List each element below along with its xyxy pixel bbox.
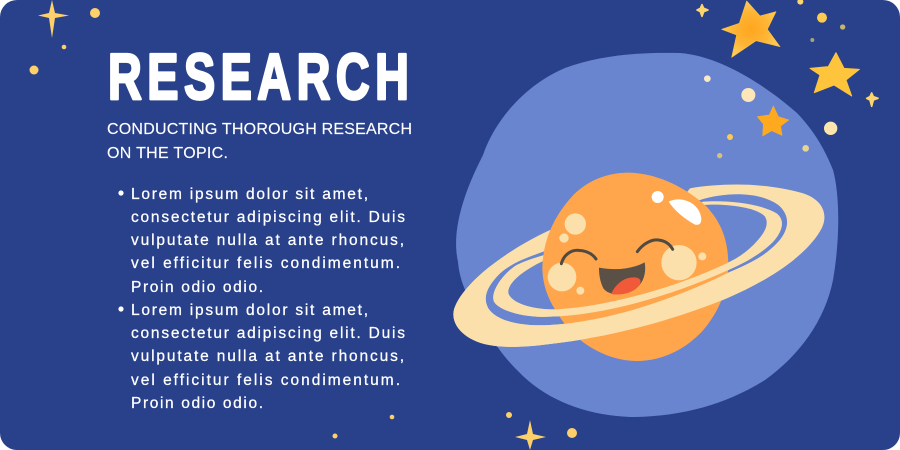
bullet one <box>118 186 405 296</box>
bullet two <box>118 302 405 412</box>
sparkles <box>697 5 878 106</box>
bullet two: Lorem ipsum dolor sit amet, <box>131 302 368 319</box>
cheeks <box>548 245 697 291</box>
planet with rings <box>453 173 824 361</box>
tongue <box>611 277 641 294</box>
star small <box>757 106 789 136</box>
sparkle and dots bottom <box>332 412 577 450</box>
ring in front of planet <box>453 259 794 347</box>
mouth <box>599 262 645 294</box>
sparkle and dots top left <box>30 0 100 74</box>
planet highlights <box>559 191 706 295</box>
eyes <box>561 240 673 264</box>
star medium <box>810 53 859 96</box>
dots <box>704 0 845 158</box>
ring behind planet <box>453 185 824 347</box>
blue blob behind planet <box>456 53 838 417</box>
subtitle <box>107 121 412 162</box>
bullet two: vel efficitur felis condimentum. <box>131 372 400 389</box>
bullet one: consectetur adipiscing elit. Duis <box>131 209 405 226</box>
bullet one: vulputate nulla at ante rhoncus, <box>131 232 404 249</box>
bullet one: Lorem ipsum dolor sit amet, <box>131 186 368 203</box>
stars and dots top right <box>697 0 878 158</box>
bullet two: consectetur adipiscing elit. Duis <box>131 325 405 342</box>
bullet two: Proin odio odio. <box>131 395 263 412</box>
bullet one: vel efficitur felis condimentum. <box>131 255 400 272</box>
bullet one: Proin odio odio. <box>131 279 263 296</box>
star large <box>722 1 780 57</box>
subtitle: CONDUCTING THOROUGH RESEARCH <box>107 121 412 138</box>
bullet list <box>118 186 405 412</box>
subtitle: ON THE TOPIC. <box>107 145 228 162</box>
title: RESEARCH <box>108 42 414 114</box>
planet body <box>542 173 728 361</box>
bullet two: vulputate nulla at ante rhoncus, <box>131 348 404 365</box>
